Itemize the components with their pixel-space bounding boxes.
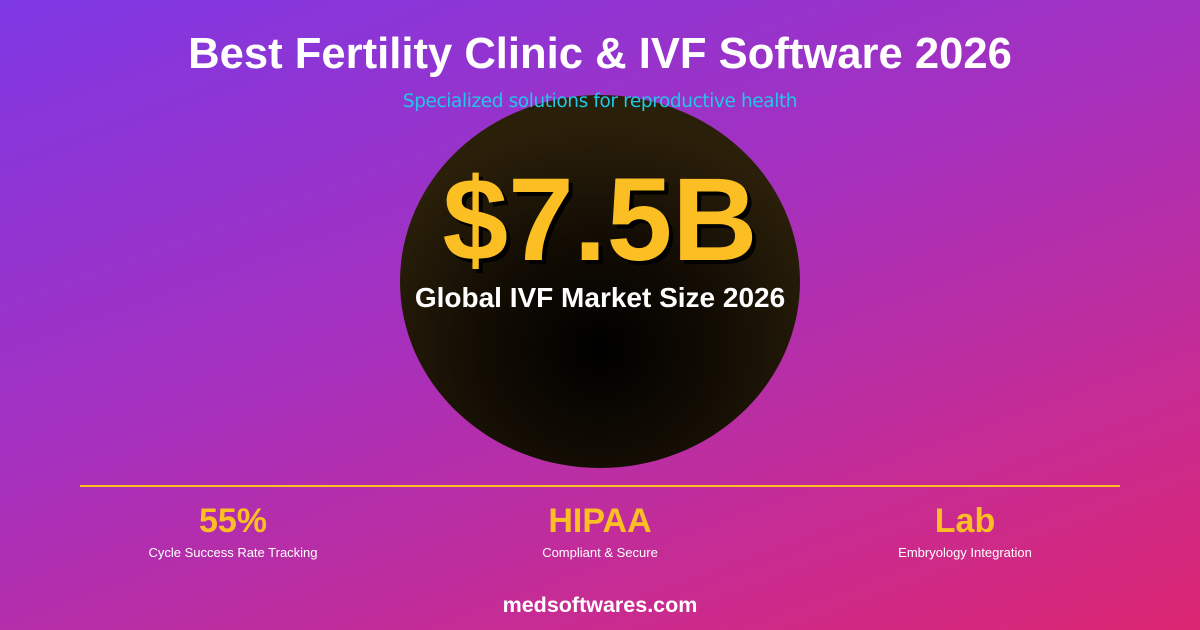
stat: HIPAA: Compliant & Secure xyxy=(542,545,658,560)
stat: Lab: Lab xyxy=(935,502,995,540)
stat: Lab: Embryology Integration xyxy=(898,545,1032,560)
stat: HIPAA xyxy=(542,502,658,560)
footer: medsoftwares.com xyxy=(503,593,697,617)
stat: success rate xyxy=(148,502,318,560)
stat: Lab xyxy=(898,502,1032,560)
title: Best Fertility Clinic & IVF Software 2026 xyxy=(188,30,1012,78)
stat: HIPAA: HIPAA xyxy=(548,502,652,540)
stat: success rate: 55% xyxy=(199,502,267,540)
stat label: Global IVF Market Size 2026 xyxy=(415,282,785,313)
subtitle: Specialized solutions for reproductive health xyxy=(403,91,797,112)
stat: success rate: Cycle Success Rate Tracking xyxy=(148,545,318,560)
hero circle xyxy=(400,95,800,468)
big stat: $7.5B xyxy=(443,154,757,286)
divider line xyxy=(80,485,1120,487)
